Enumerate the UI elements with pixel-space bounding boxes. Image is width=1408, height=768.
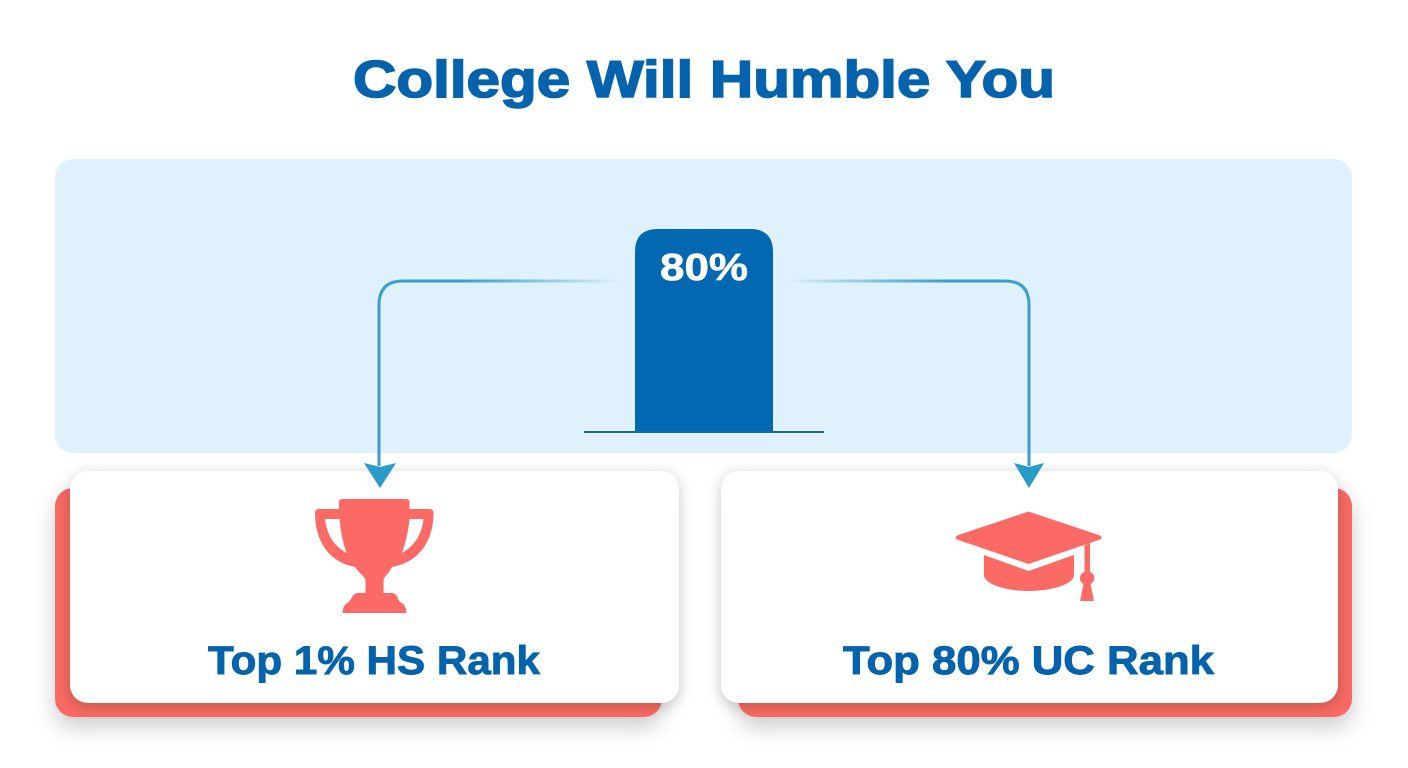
card: top 80% UC rank [721, 471, 1352, 717]
white card, left [70, 471, 679, 703]
title: College Will Humble You [353, 51, 1055, 109]
panel: light blue chart background [55, 159, 1352, 453]
bar chart: 80% bar [584, 229, 824, 433]
card: top 1% high school rank [55, 471, 679, 717]
arrow: bar to top 1% card [364, 281, 622, 488]
bar [635, 229, 773, 432]
arrow: bar to top 80% card [785, 281, 1044, 488]
icon: trophy [315, 499, 434, 613]
card label, right: Top 80% UC Rank [843, 639, 1215, 683]
bar value label: 80% [660, 247, 748, 289]
red backing card, left [55, 488, 662, 717]
icon: graduation cap [956, 512, 1102, 601]
card label, left: Top 1% HS Rank [208, 639, 541, 683]
red backing card, right [738, 488, 1352, 717]
white card, right [721, 471, 1338, 703]
bar baseline [584, 431, 824, 433]
